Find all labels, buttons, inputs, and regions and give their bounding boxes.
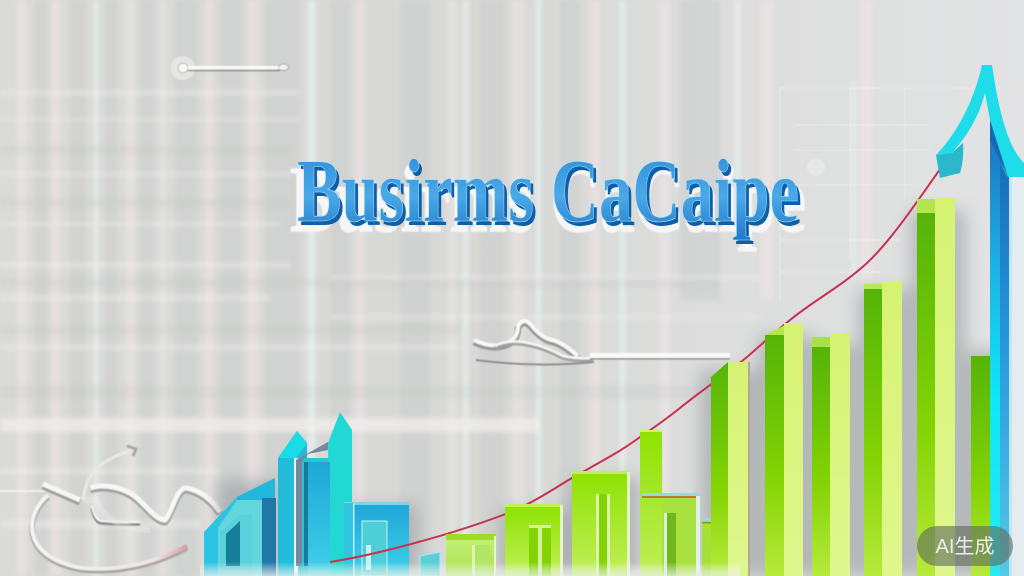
bar 2: [765, 323, 803, 576]
bar 6: [971, 356, 990, 576]
bar 1: [711, 362, 750, 576]
building: right block: [344, 502, 409, 576]
title face: Busirms CaCaipe: [297, 142, 799, 241]
building B: [505, 504, 563, 576]
title shadow: Busirms CaCaipe: [300, 146, 802, 245]
green bar chart: [711, 198, 990, 576]
large growth arrow: [936, 65, 1024, 576]
AI generated badge: AI生成: [936, 535, 994, 558]
building D: [640, 430, 700, 576]
bar 5: [917, 198, 955, 576]
red growth curve: [330, 155, 950, 562]
building: tall tower: [278, 431, 307, 576]
green small buildings: [446, 430, 728, 576]
arrow head: [936, 65, 1024, 178]
building A: [446, 534, 496, 576]
bottom fade: [200, 562, 740, 576]
bar 4: [864, 281, 902, 576]
building E: [702, 518, 728, 576]
blue city buildings: [204, 412, 440, 576]
building C: [572, 471, 630, 576]
AI generated badge: [917, 526, 1013, 566]
title ghost extrusion: Busirms CaCaipe: [290, 148, 806, 252]
bar 3: [812, 334, 850, 576]
decorative ribbon: top line with knob: [171, 56, 289, 80]
building: small stub: [420, 552, 440, 576]
cast shadows behind chart: [218, 210, 1016, 576]
decorative ribbon: lower-left swirl: [0, 446, 220, 571]
decorative ribbon: centre squiggle and line: [474, 321, 730, 365]
building: tallest tower: [296, 412, 352, 576]
title: [290, 142, 806, 252]
building: left low block: [204, 478, 276, 576]
arrow shaft: [990, 140, 1024, 576]
